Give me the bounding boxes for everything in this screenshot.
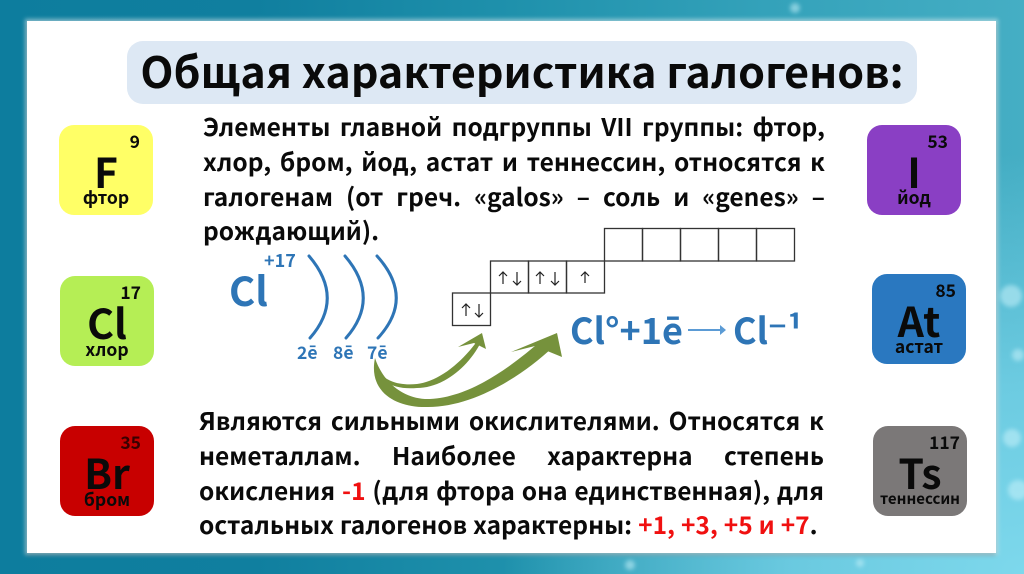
text block: definition of halogens: хлор, бром, йод, астат и теннессин, относятся к <box>203 144 825 179</box>
tile: tennessine: Ts <box>898 441 942 501</box>
tile: tennessine: 117 <box>929 430 960 455</box>
text block: definition of halogens: рождающий). <box>203 213 379 248</box>
electron count: second shell: 8ē <box>333 340 354 365</box>
tile: astatine <box>872 274 966 364</box>
tile: astatine: 85 <box>935 278 956 303</box>
tile: iodine: 53 <box>927 129 948 154</box>
tile: iodine <box>867 125 961 215</box>
reaction product: Cl⁻¹ <box>733 303 802 355</box>
tile: bromine: 35 <box>120 430 141 455</box>
tile: fluorine: F <box>94 140 118 200</box>
title: Общая характеристика галогенов: <box>140 39 904 101</box>
text block: definition of halogens: галогенам (от греч. «galos» – соль и «genes» – <box>203 179 825 214</box>
text block: oxidising properties <box>199 403 824 542</box>
tile: chlorine <box>60 276 154 366</box>
tile: tennessine: теннессин <box>880 488 960 509</box>
text block: definition of halogens <box>203 109 825 248</box>
tile: fluorine: 9 <box>130 129 140 154</box>
text block: oxidising properties: неметаллам. Наиболее характерна степень <box>199 438 824 473</box>
tile: astatine: астат <box>895 334 943 359</box>
chlorine atom symbol: Cl <box>229 260 268 318</box>
tile: tennessine <box>873 426 967 516</box>
tile: chlorine: 17 <box>120 280 141 305</box>
tile: bromine: Br <box>84 441 130 501</box>
electron count: third shell: 7ē <box>367 340 388 365</box>
tile: chlorine: Cl <box>87 291 127 351</box>
tile: bromine <box>60 426 154 516</box>
electron count: first shell: 2ē <box>297 340 318 365</box>
tile: iodine: йод <box>897 185 931 210</box>
reaction equation: Cl°+1ē <box>570 303 683 355</box>
text block: oxidising properties: Являются сильными окислителями. Относятся к <box>199 403 824 438</box>
nuclear charge: +17 <box>264 247 296 273</box>
tile: fluorine <box>59 125 153 215</box>
tile: iodine: I <box>907 140 921 200</box>
text block: definition of halogens: Элементы главной подгруппы VII группы: фтор, <box>203 109 825 144</box>
tile: fluorine: фтор <box>83 185 129 210</box>
tile: bromine: бром <box>84 487 130 512</box>
title background pill <box>127 41 917 104</box>
text block: oxidising properties: остальных галогенов характерны: +1, +3, +5 и +7. <box>199 507 818 542</box>
tile: chlorine: хлор <box>85 337 129 362</box>
tile: astatine: At <box>898 289 940 349</box>
text block: oxidising properties: окисления -1 (для фтора она единственная), для <box>199 473 824 508</box>
